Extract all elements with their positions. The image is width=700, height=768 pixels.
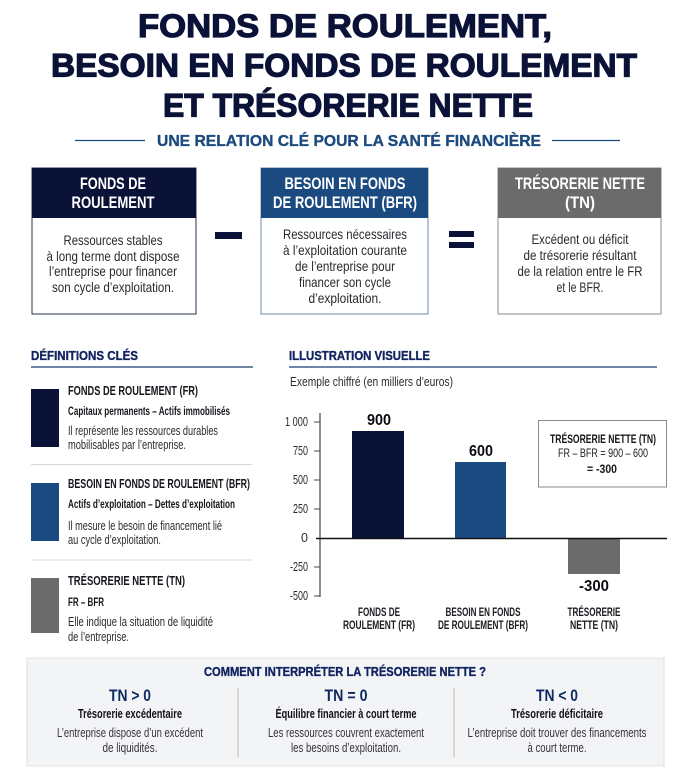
callout: FR – BFR = 900 – 600 (558, 446, 648, 460)
definition: FR: mobilisables par l’entreprise. (68, 438, 186, 452)
panel: tresorerie nette: TRÉSORERIE NETTE (515, 174, 645, 193)
interpretation: TN negative: Trésorerie déficitaire (511, 707, 603, 721)
definition: BFR (31, 477, 250, 547)
callout (538, 420, 666, 487)
panel: fonds de roulement: ROULEMENT (72, 193, 155, 212)
panel: fonds de roulement: à long terme dont dispose (46, 248, 180, 264)
category labels: FONDS DE (358, 607, 400, 619)
panel: tresorerie nette: Excédent ou déficit (532, 231, 629, 247)
bar chart: 250 (293, 502, 308, 516)
definition: FR: FONDS DE ROULEMENT (FR) (68, 384, 198, 398)
bar chart: 500 (293, 473, 308, 487)
interpretation: TN positive: TN > 0 (109, 686, 151, 705)
definition: FR: Il représente les ressources durables (68, 424, 218, 438)
interpretation: TN zero: Les ressources couvrent exactement (268, 726, 424, 740)
category labels: TRÉSORERIE (568, 606, 621, 619)
bar: FR: 900 (367, 412, 391, 429)
interpretation: TN positive: L’entreprise dispose d’un excédent (57, 726, 203, 740)
category labels (343, 606, 621, 632)
category labels: ROULEMENT (FR) (343, 620, 415, 632)
interpretation: TN negative: à court terme. (528, 741, 586, 755)
bar: BFR (455, 443, 506, 538)
interpretation: TN negative: TN < 0 (536, 686, 578, 705)
heading: illustration (289, 349, 657, 389)
interpretation: TN zero (268, 686, 424, 755)
title: ET TRÉSORERIE NETTE (163, 86, 533, 124)
definition: BFR: au cycle d’exploitation. (68, 533, 161, 547)
panel: fonds de roulement (32, 168, 196, 314)
definition: BFR: BESOIN EN FONDS DE ROULEMENT (BFR) (68, 477, 250, 491)
definition: TN: TRÉSORERIE NETTE (TN) (68, 573, 185, 588)
bar chart: 750 (293, 444, 308, 458)
definition: TN (31, 573, 213, 644)
heading: illustration: Exemple chiffré (en milliers d’euros) (290, 375, 453, 389)
subtitle: UNE RELATION CLÉ POUR LA SANTÉ FINANCIÈRE (157, 131, 541, 150)
interpretation: TN zero: les besoins d’exploitation. (291, 741, 401, 755)
interpretation: TN positive: de liquidités. (102, 741, 158, 755)
bar chart: 1 000 (285, 415, 308, 429)
panel: besoin en fonds de roulement: d’exploitation. (308, 290, 382, 306)
heading: interpretation: COMMENT INTERPRÉTER LA TRÉSORERIE NETTE ? (204, 664, 486, 679)
category labels: BESOIN EN FONDS (446, 607, 521, 619)
panel: besoin en fonds de roulement: de l’entreprise pour (295, 258, 395, 274)
panel: besoin en fonds de roulement: à l’exploitation courante (283, 242, 407, 258)
definition: BFR: Il mesure le besoin de financement lié (68, 519, 222, 533)
interpretation: TN negative (468, 686, 646, 755)
panel: besoin en fonds de roulement: DE ROULEMENT (BFR) (273, 193, 417, 212)
definition: FR: Capitaux permanents – Actifs immobilisés (68, 406, 230, 418)
panel: besoin en fonds de roulement: Ressources nécessaires (283, 226, 407, 242)
panel: fonds de roulement: FONDS DE (80, 174, 146, 193)
icon: minus (215, 232, 242, 239)
bar: BFR: 600 (469, 443, 493, 460)
interpretation: TN positive: Trésorerie excédentaire (78, 707, 182, 721)
category labels: NETTE (TN) (570, 620, 618, 632)
panel: fonds de roulement: l’entreprise pour financer (49, 263, 177, 279)
interpretation: TN zero: TN = 0 (324, 686, 368, 705)
bar chart: -250 (290, 560, 308, 574)
bar chart: 0 (301, 531, 308, 545)
definition: TN: FR – BFR (68, 597, 104, 609)
definition: FR (31, 384, 230, 452)
bar: TN: -300 (579, 578, 609, 595)
callout: TRÉSORERIE NETTE (TN) (550, 433, 656, 446)
bar chart: -500 (290, 589, 308, 603)
panel: fonds de roulement: son cycle d’exploitation. (52, 279, 174, 295)
bar: TN (568, 538, 620, 595)
definition: BFR: Actifs d’exploitation – Dettes d’exploitation (68, 499, 235, 511)
bar: FR (352, 412, 404, 538)
definition: TN: Elle indique la situation de liquidité (68, 615, 213, 629)
panel: tresorerie nette: de la relation entre le FR (518, 263, 642, 279)
interpretation: TN negative: L’entreprise doit trouver des financements (468, 726, 646, 740)
panel: tresorerie nette: (TN) (565, 193, 595, 212)
icon: equals (449, 231, 474, 248)
title: BESOIN EN FONDS DE ROULEMENT (51, 48, 637, 84)
panel: interpretation (27, 658, 664, 766)
title (51, 8, 637, 124)
callout: = -300 (587, 464, 617, 476)
bar chart (285, 412, 667, 632)
panel: fonds de roulement: Ressources stables (64, 232, 162, 248)
heading: definitions: DÉFINITIONS CLÉS (31, 348, 138, 363)
title: FONDS DE ROULEMENT, (138, 8, 552, 44)
panel: besoin en fonds de roulement: BESOIN EN FONDS (284, 174, 406, 193)
panel: tresorerie nette (498, 168, 661, 314)
panel: besoin en fonds de roulement (261, 168, 428, 314)
panel: tresorerie nette: et le BFR. (556, 279, 604, 295)
definition: TN: de l’entreprise. (68, 630, 129, 644)
category labels: DE ROULEMENT (BFR) (438, 620, 528, 632)
panel: besoin en fonds de roulement: financer son cycle (299, 274, 391, 290)
heading: illustration: ILLUSTRATION VISUELLE (289, 349, 430, 363)
interpretation: TN zero: Équilibre financier à court terme (276, 706, 417, 721)
panel: tresorerie nette: de trésorerie résultant (524, 247, 637, 263)
panel: definitions (31, 348, 253, 644)
interpretation: TN positive (57, 686, 203, 755)
